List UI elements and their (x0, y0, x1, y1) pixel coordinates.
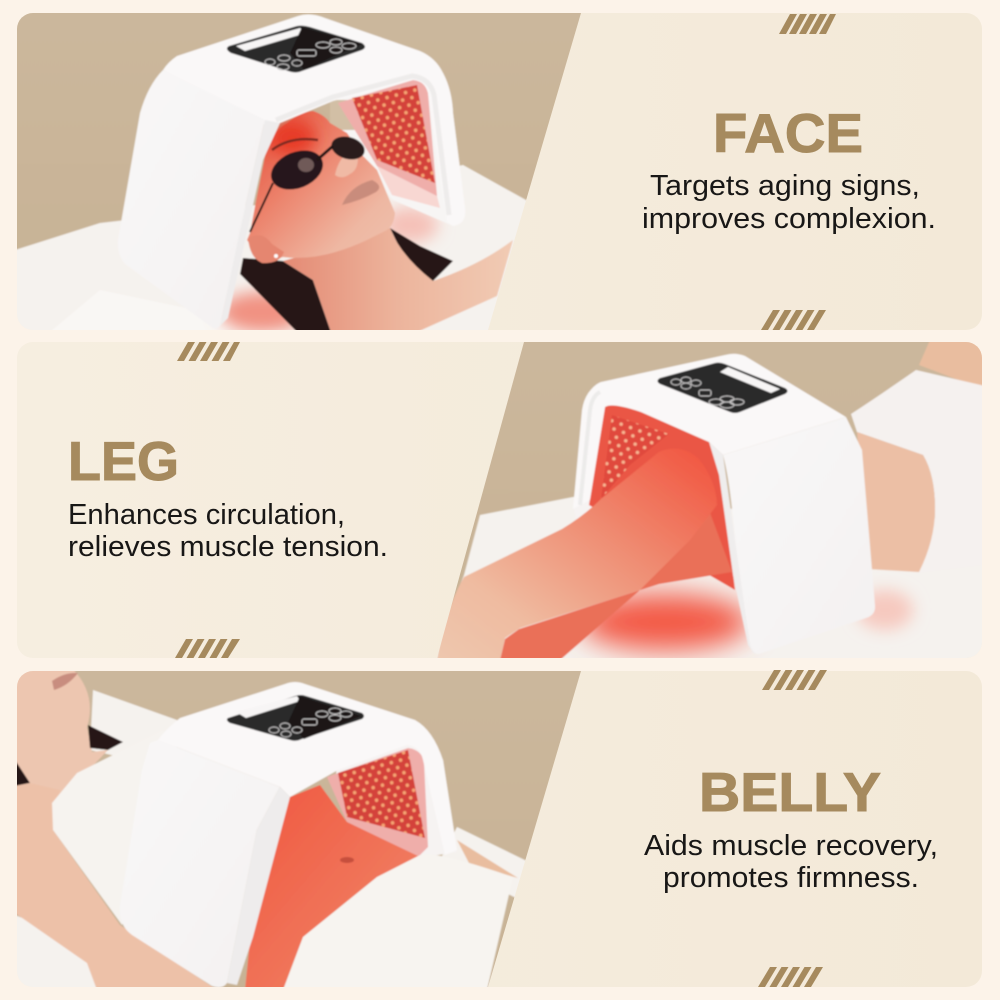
hatch: bottom (758, 967, 823, 987)
LED panel (338, 750, 425, 838)
panel: belly (15, 669, 982, 990)
arm and chest (15, 783, 217, 990)
text: leg benefits: Enhances circulation, (68, 499, 345, 531)
eyebrow (272, 139, 318, 150)
navel (340, 857, 354, 863)
text: belly benefits (644, 830, 938, 894)
device front leg (723, 417, 875, 654)
panel: leg (17, 340, 990, 660)
photo: leg treatment (430, 340, 990, 660)
face (247, 111, 395, 263)
hatch: top (177, 342, 240, 361)
control panel (658, 363, 788, 413)
hatch: bottom (761, 310, 826, 330)
upper towel (51, 754, 144, 926)
shoulder and neck (283, 228, 513, 332)
upper leg (437, 449, 717, 660)
ear (248, 235, 284, 263)
text: face benefits: Targets aging signs, (650, 170, 920, 202)
device rear arm (594, 382, 600, 386)
text: belly benefits: Aids muscle recovery, (644, 830, 938, 862)
belly (245, 785, 420, 990)
lower towel (283, 854, 513, 990)
control panel (227, 695, 364, 741)
lower leg (500, 510, 732, 660)
heading: LEG: LEG (68, 430, 179, 492)
heading: BELLY: BELLY (699, 761, 881, 823)
bed glow (580, 594, 750, 650)
arm right (457, 840, 518, 878)
hair (240, 228, 453, 332)
panel: face (15, 11, 982, 335)
hatch: top (779, 14, 836, 34)
device top (573, 354, 875, 655)
photo: face treatment (15, 11, 590, 335)
hair (15, 725, 123, 786)
hatch: top (762, 670, 827, 690)
lips (342, 180, 379, 205)
device rear arm (338, 81, 446, 222)
LED panel (352, 85, 435, 183)
goggles (250, 133, 367, 232)
text: face benefits: improves complexion. (642, 203, 936, 235)
text: belly benefits: promotes firmness. (663, 862, 919, 894)
device rear arm (335, 744, 445, 856)
thigh (857, 432, 935, 572)
face and neck (15, 669, 108, 800)
text: face benefits (642, 170, 936, 235)
heading: FACE: FACE (713, 102, 863, 164)
forehead glow (268, 120, 316, 156)
shorts (850, 369, 982, 521)
text: leg benefits (68, 499, 388, 563)
hatch: bottom (175, 639, 240, 658)
device inner rim (708, 442, 750, 647)
upper skin (919, 342, 982, 386)
control panel (227, 26, 365, 73)
device front and top (118, 14, 465, 329)
nose (334, 157, 358, 178)
LED panel (601, 415, 669, 499)
text: leg benefits: relieves muscle tension. (68, 531, 388, 563)
device front and top (120, 682, 457, 987)
photo: belly treatment (15, 669, 590, 990)
